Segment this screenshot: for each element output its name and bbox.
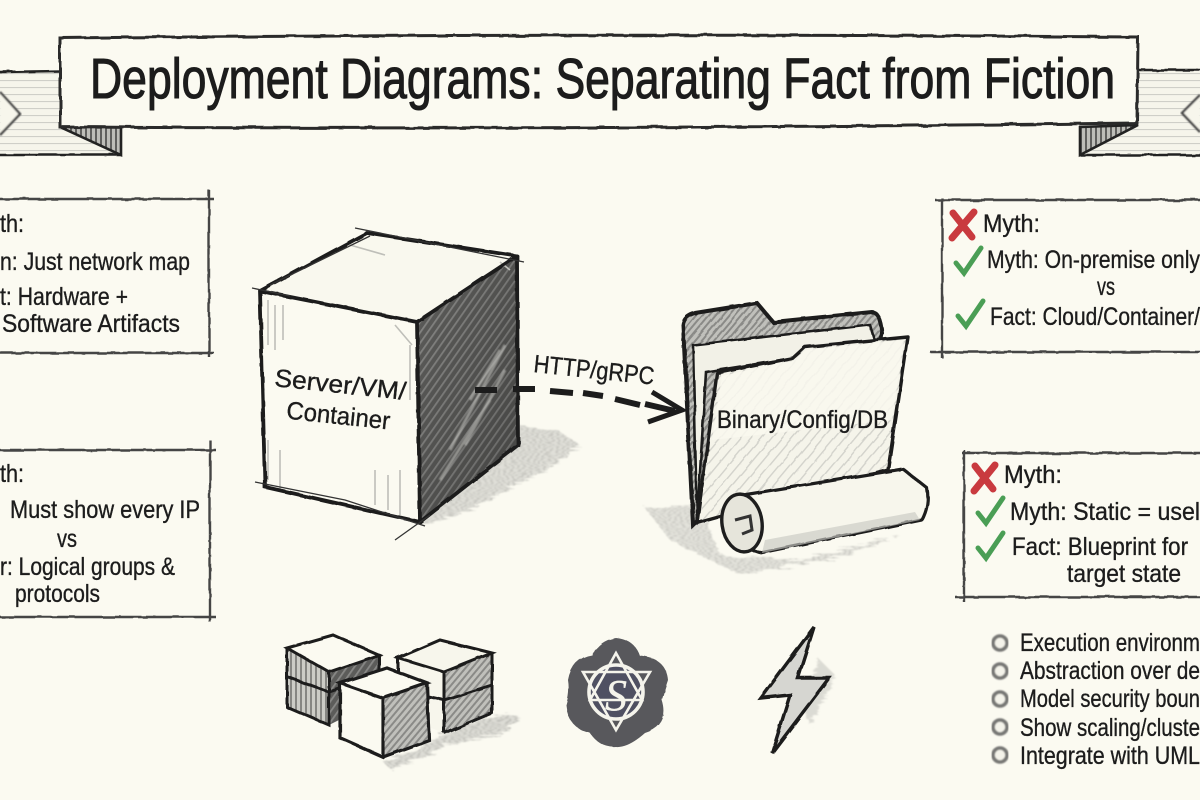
cube label xyxy=(273,364,407,435)
panel: myth just network map: n: Just network map xyxy=(0,248,190,276)
icon: turtle badge xyxy=(566,638,668,747)
panel: myth just network map: th: xyxy=(0,210,24,238)
panel: myth on-premise only: Myth: xyxy=(983,210,1040,238)
back of folder xyxy=(683,303,882,525)
right stack xyxy=(398,640,492,733)
icon: red cross xyxy=(952,212,974,238)
folder papers xyxy=(693,325,876,523)
panel: myth must show every IP: vs xyxy=(57,525,77,553)
icon: red cross xyxy=(974,465,995,491)
icon: green check xyxy=(956,248,981,273)
icon: lightning bolt xyxy=(761,627,836,753)
left stack xyxy=(287,648,329,725)
panel: myth must show every IP: r: Logical groups & xyxy=(0,553,175,581)
cube label: Container xyxy=(285,397,391,435)
banner body xyxy=(60,35,1138,128)
title banner xyxy=(0,35,1200,155)
panel: myth on-premise only: vs xyxy=(1097,273,1115,301)
panel: myth static useless xyxy=(955,450,1200,602)
folder with scroll xyxy=(645,303,928,575)
panel: myth just network map: Software Artifacts xyxy=(2,310,180,338)
icon: stacked cubes cluster xyxy=(287,635,520,768)
scroll xyxy=(725,469,928,553)
cube label: Server/VM/ xyxy=(273,364,407,406)
panel: myth just network map xyxy=(0,190,214,357)
folder shadow xyxy=(645,505,900,575)
panel: myth must show every IP: Must show every IP xyxy=(10,496,200,524)
server cube xyxy=(252,228,580,540)
panel: myth must show every IP: protocols xyxy=(15,580,100,608)
folder front xyxy=(697,337,908,523)
panel: myth static useless: target state xyxy=(1067,560,1181,588)
left ribbon tail xyxy=(0,71,121,155)
icon: turtle badge: S xyxy=(605,671,627,720)
bullet list xyxy=(993,629,1200,770)
icon: green check xyxy=(958,301,983,326)
panel: myth must show every IP: th: xyxy=(0,460,24,488)
icon: green check xyxy=(978,498,1003,523)
right ribbon tail xyxy=(1080,70,1200,155)
panel: myth on-premise only xyxy=(930,198,1200,358)
panel: myth just network map: t: Hardware + xyxy=(0,283,128,311)
folder label: Binary/Config/DB xyxy=(717,406,888,434)
connector arrow: HTTP/gRPC xyxy=(475,350,682,422)
panel: myth must show every IP xyxy=(0,440,216,622)
panel: myth static useless: Myth: xyxy=(1004,461,1062,489)
connector arrow: HTTP/gRPC: HTTP/gRPC xyxy=(532,350,656,391)
front cube xyxy=(340,668,427,698)
icon: green check xyxy=(978,533,1003,558)
cube shadow xyxy=(420,425,580,525)
